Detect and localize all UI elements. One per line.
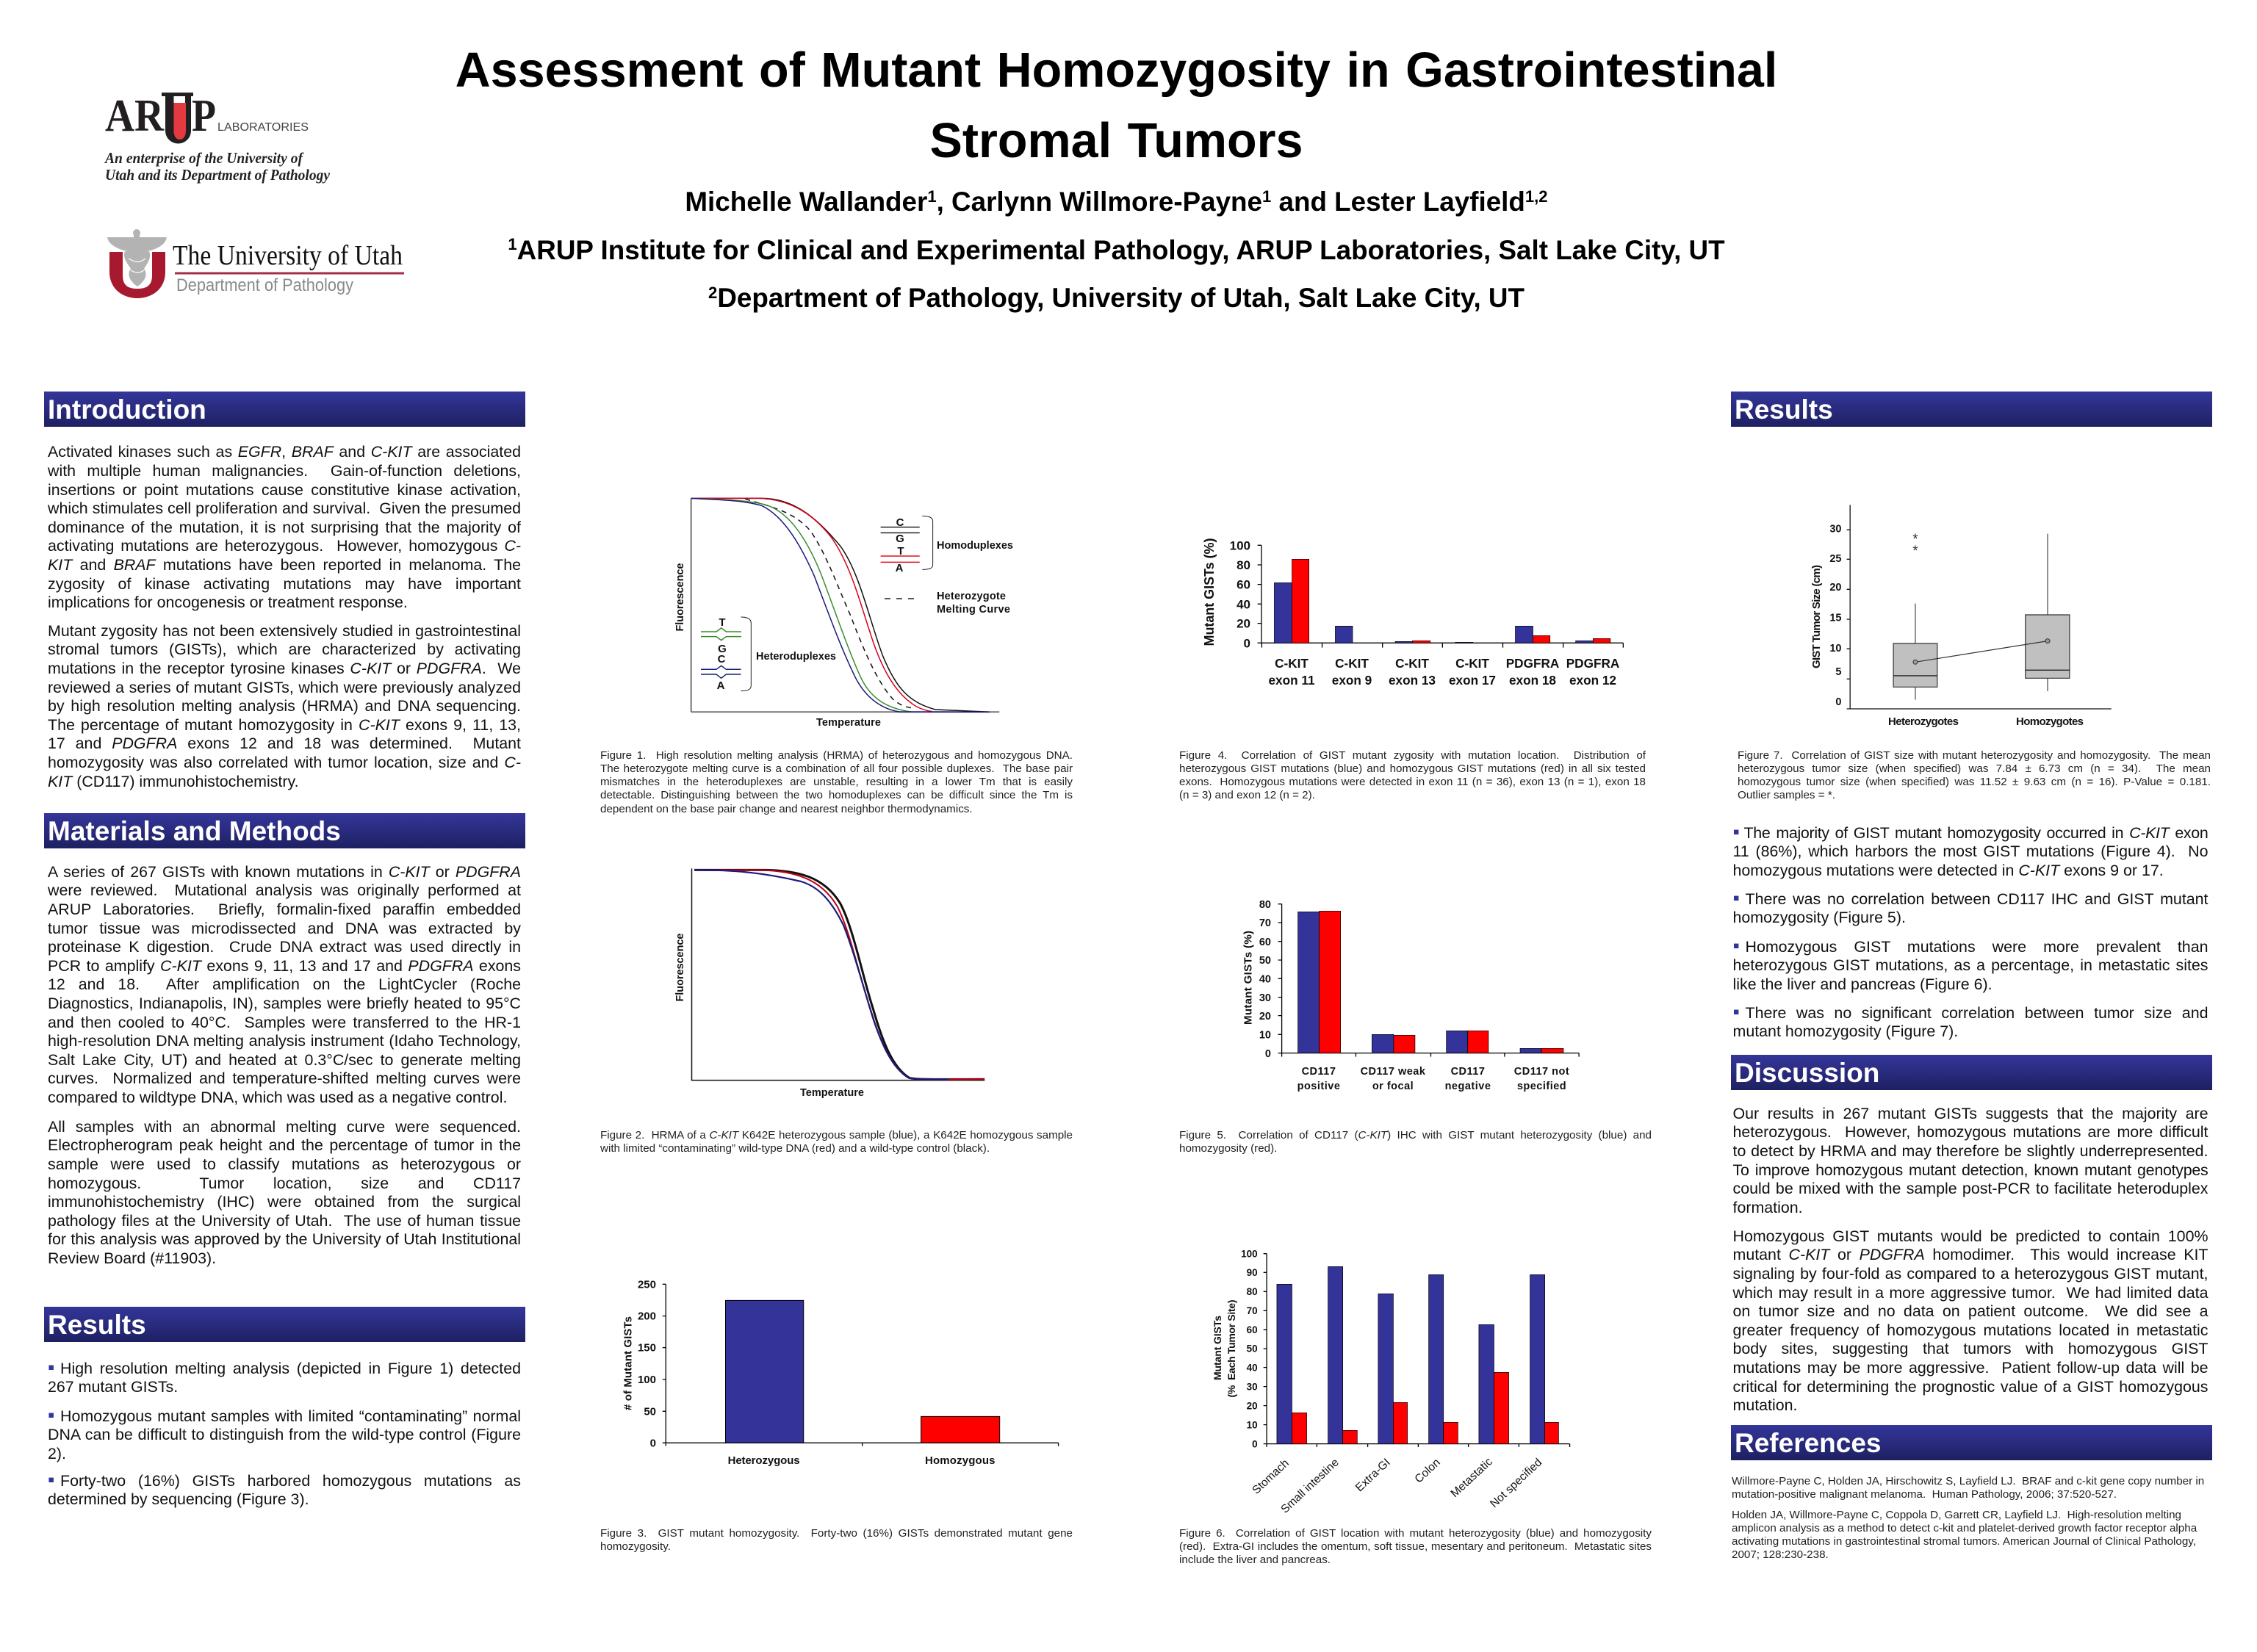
figure 5: bar chart by CD117 status: 80 bbox=[1259, 899, 1271, 911]
text: discussion paragraph 1: To improve homozygous mutant detection, known mutant genotypes bbox=[1732, 1161, 2209, 1179]
figure 4: bar chart by exon: exon 17 bbox=[1449, 673, 1496, 688]
figure 4: bar chart by exon: exon 18 bbox=[1509, 673, 1556, 688]
text: discussion paragraph 1: to detect by HRMA and may therefore be slightly underrepresented. bbox=[1732, 1142, 2209, 1160]
figure 6: bar chart by tumor location: (% Each Tumor Site) bbox=[1225, 1300, 1237, 1397]
figure 1: melting curves: T bbox=[719, 616, 726, 629]
figure 7: box plot of tumor size: 30 bbox=[1829, 523, 1841, 535]
text: methods paragraph 2: All samples with an abnormal melting curve were sequenced. bbox=[48, 1118, 521, 1136]
text: discussion paragraph 2: mutations may be more aggressive. Patient follow-up data will be bbox=[1732, 1359, 2209, 1377]
figure 6: bar chart by tumor location: 20 bbox=[1247, 1400, 1258, 1411]
bullet: metastatic sites: Homozygous GIST mutations were more prevalent than bbox=[1746, 938, 2209, 956]
bullet: forty-two GISTs bbox=[48, 1468, 521, 1508]
text: discussion paragraph 2: critical for determining the prognostic value of a GIST homozygous bbox=[1732, 1378, 2209, 1396]
authors: Michelle Wallander1, Carlynn Willmore-Payne1 and Lester Layfield1,2 bbox=[685, 187, 1548, 217]
caption: figure 4 bbox=[1179, 749, 1646, 801]
figure 5: bar chart by CD117 status: 30 bbox=[1259, 992, 1271, 1004]
text: introduction paragraph 1 bbox=[48, 443, 521, 611]
logo: ARUP Laboratories: LABORATORIES bbox=[217, 121, 309, 134]
text: methods paragraph 1: tumor tissue was microdissected and DNA was extracted by bbox=[48, 920, 521, 937]
caption: figure 1: The heterozygote melting curve is a combination of all four possible duplexes. The base pair bbox=[600, 762, 1073, 775]
figure 1: melting curves: Homoduplexes bbox=[937, 540, 1013, 552]
text: introduction paragraph 2: The percentage of mutant homozygosity in C-KIT exons 9, 11, 13, bbox=[48, 716, 521, 734]
bullet: forty-two GISTs: Forty-two (16%) GISTs harbored homozygous mutations as bbox=[60, 1472, 521, 1490]
bullet: contaminating DNA: DNA can be difficult to distinguish from the wild-type control (Figure bbox=[48, 1426, 521, 1443]
caption: figure 7: Figure 7. Correlation of GIST size with mutant heterozygosity and homozygosity. The mean bbox=[1738, 749, 2211, 762]
caption: figure 3: homozygosity. bbox=[600, 1540, 671, 1553]
text: discussion paragraph 2: mutation. bbox=[1732, 1396, 1797, 1414]
caption: figure 1: mismatches in the heteroduplexes are unstable, resulting in a lower Tm that is easily bbox=[600, 776, 1073, 788]
figure 2: HRMA curves: Fluorescence bbox=[674, 933, 686, 1002]
heading: References bbox=[1731, 1425, 2212, 1460]
caption: figure 3 bbox=[600, 1527, 1073, 1553]
text: introduction paragraph 2: by high resolution melting analysis (HRMA) and DNA sequencing. bbox=[48, 697, 521, 715]
figure 7: box plot of tumor size: GIST Tumor Size (cm) bbox=[1810, 565, 1823, 668]
figure 7: box plot of tumor size: 15 bbox=[1829, 613, 1841, 624]
text: discussion paragraph 1: formation. bbox=[1732, 1199, 1803, 1216]
text: reference 1: Willmore-Payne C, Holden JA, Hirschowitz S, Layfield LJ. BRAF and c-kit gene copy number in bbox=[1732, 1475, 2204, 1487]
logo: ARUP Laboratories: AR bbox=[105, 91, 165, 141]
figure 5: bar chart by CD117 status: 20 bbox=[1259, 1011, 1271, 1022]
text: discussion paragraph 2: Homozygous GIST mutants would be predicted to contain 100% bbox=[1732, 1227, 2209, 1245]
affiliation 2: 2Department of Pathology, University of Utah, Salt Lake City, UT bbox=[708, 283, 1525, 313]
text: methods paragraph 1: PCR to amplify C-KIT exons 9, 11, 13 and 17 and PDGFRA exons bbox=[48, 957, 521, 975]
figure 4: bar chart by exon: 100 bbox=[1230, 538, 1250, 552]
caption: figure 1: dependent on the base pair change and nearest neighbor thermodynamics. bbox=[600, 803, 973, 815]
figure 6: bar chart by tumor location: Colon bbox=[1413, 1456, 1443, 1486]
text: reference 1: mutation-positive malignant melanoma. Human Pathology, 2006; 37:520-527. bbox=[1732, 1488, 2117, 1501]
bullet: forty-two GISTs: determined by sequencing (Figure 3). bbox=[48, 1490, 309, 1508]
bullet: tumor size: There was no significant correlation between tumor size and bbox=[1746, 1004, 2209, 1022]
bullet: exon 11: The majority of GIST mutant homozygosity occurred in C-KIT exon bbox=[1744, 824, 2209, 842]
logo: The University of Utah bbox=[107, 229, 404, 298]
heading: Results (right column) bbox=[1731, 392, 2212, 427]
figure 6: bar chart by tumor location: Mutant GISTs bbox=[1212, 1316, 1223, 1380]
title: Assessment of Mutant Homozygosity in Gastrointestinal bbox=[456, 43, 1777, 98]
figure 4: bar chart by exon: 40 bbox=[1237, 597, 1250, 611]
figure 5: bar chart by CD117 status: CD117 bbox=[1302, 1066, 1336, 1078]
figure 7: box plot of tumor size: * bbox=[1912, 544, 1918, 559]
figure 4: bar chart by exon: C-KIT bbox=[1455, 656, 1489, 671]
figure 4: bar chart by exon: 20 bbox=[1237, 617, 1250, 631]
text: methods paragraph 1: Diagnostics, Indianapolis, IN), samples were briefly heated to 95°C bbox=[48, 995, 521, 1012]
figure 1: melting curves: Fluorescence bbox=[674, 563, 686, 632]
figure 4: bar chart by exon: exon 11 bbox=[1268, 673, 1315, 688]
bullet: metastatic sites: ▪ bbox=[1732, 934, 1740, 956]
text: methods paragraph 2: immunohistochemistry (IHC) were obtained from the surgical bbox=[48, 1193, 521, 1211]
affiliation 1: 1ARUP Institute for Clinical and Experimental Pathology, ARUP Laboratories, Salt Lake City, UT bbox=[508, 235, 1725, 264]
text: discussion paragraph 1: heterozygous. However, homozygous mutations are more difficult bbox=[1732, 1123, 2209, 1141]
figure 4: bar chart by exon: exon 9 bbox=[1332, 673, 1372, 688]
figure 7: box plot of tumor size: * bbox=[1912, 532, 1918, 547]
figure 5: bar chart by CD117 status bbox=[1242, 899, 1579, 1092]
figure 1: melting curves: G bbox=[718, 643, 727, 655]
figure 5: bar chart by CD117 status: CD117 weak bbox=[1361, 1066, 1426, 1078]
text: methods paragraph 2: homozygous. Tumor location, size and CD117 bbox=[48, 1175, 521, 1192]
logo: ARUP Laboratories bbox=[104, 91, 331, 184]
text: introduction paragraph 2: 17 and PDGFRA exons 12 and 18 was determined. Mutant bbox=[48, 735, 521, 752]
caption: figure 6 bbox=[1179, 1527, 1652, 1566]
figure 5: bar chart by CD117 status: Mutant GISTs (%) bbox=[1242, 931, 1255, 1025]
text: introduction paragraph 2: reviewed a series of mutant GISTs, which were previously analyzed bbox=[48, 679, 521, 696]
text: reference 2: amplicon analysis as a method to detect c-kit and platelet-derived growth factor receptor alpha bbox=[1732, 1522, 2197, 1534]
figure 7: box plot of tumor size: Homozygotes bbox=[2016, 715, 2084, 728]
figure 7: box plot of tumor size bbox=[1810, 505, 2112, 728]
text: discussion paragraph 1 bbox=[1732, 1105, 2209, 1216]
figure 5: bar chart by CD117 status: 60 bbox=[1259, 937, 1271, 948]
figure 5: bar chart by CD117 status: or focal bbox=[1372, 1081, 1414, 1092]
figure 6: bar chart by tumor location: 10 bbox=[1247, 1419, 1258, 1430]
figure 4: bar chart by exon: PDGFRA bbox=[1506, 656, 1559, 671]
caption: figure 1: Figure 1. High resolution melting analysis (HRMA) of heterozygous and homozygous DNA. bbox=[600, 749, 1073, 762]
figure 4: bar chart by exon: C-KIT bbox=[1395, 656, 1429, 671]
figure 6: bar chart by tumor location: 70 bbox=[1247, 1305, 1258, 1316]
caption: figure 7: heterozygous tumor size (when specified) was 7.84 ± 6.73 cm (n = 34). The mean bbox=[1738, 762, 2211, 775]
text: introduction paragraph 2: mutations in the receptor tyrosine kinases C-KIT or PDGFRA. We bbox=[48, 660, 521, 677]
bullet: HRMA detection: High resolution melting analysis (depicted in Figure 1) detected bbox=[60, 1360, 521, 1377]
text: methods paragraph 1: 12 and 18. After amplification on the LightCycler (Roche bbox=[48, 975, 521, 993]
figure 1: melting curves bbox=[674, 498, 1013, 729]
figure 1: melting curves: A bbox=[896, 562, 904, 574]
figure 7: box plot of tumor size: 25 bbox=[1829, 553, 1841, 565]
bullet: forty-two GISTs: ▪ bbox=[48, 1468, 54, 1490]
figure 3: bar chart of GIST homozygosity: Homozygous bbox=[925, 1454, 995, 1467]
figure 3: bar chart of GIST homozygosity: 200 bbox=[638, 1310, 656, 1323]
text: methods paragraph 1: and then cooled to 40°C. Samples were transferred to the HR-1 bbox=[48, 1014, 521, 1031]
heading: Results (left column): Results bbox=[48, 1310, 146, 1340]
figure 3: bar chart of GIST homozygosity: 250 bbox=[638, 1278, 656, 1291]
figure 1: melting curves: C bbox=[718, 653, 726, 666]
figure 3: bar chart of GIST homozygosity: 100 bbox=[638, 1374, 656, 1386]
figure 1: melting curves: Heterozygote bbox=[937, 591, 1006, 602]
figure 5: bar chart by CD117 status: 0 bbox=[1265, 1048, 1271, 1060]
figure 6: bar chart by tumor location: Metastatic bbox=[1448, 1455, 1495, 1500]
bullet: contaminating DNA: 2). bbox=[48, 1445, 66, 1462]
text: methods paragraph 1: high-resolution DNA melting analysis instrument (Idaho Technology, bbox=[48, 1032, 521, 1050]
figure 6: bar chart by tumor location: Stomach bbox=[1250, 1457, 1292, 1497]
logo: The University of Utah: Department of Pathology bbox=[176, 275, 353, 295]
figure 1: melting curves: Melting Curve bbox=[937, 604, 1010, 616]
bullet: tumor size bbox=[1732, 1000, 2209, 1040]
text: methods paragraph 1 bbox=[48, 863, 521, 1106]
bullet: HRMA detection bbox=[48, 1356, 521, 1396]
figure 4: bar chart by exon: C-KIT bbox=[1335, 656, 1369, 671]
bullet: metastatic sites: like the liver and pancreas (Figure 6). bbox=[1732, 975, 1993, 993]
figure 4: bar chart by exon: C-KIT bbox=[1275, 656, 1309, 671]
figure 6: bar chart by tumor location: Extra-GI bbox=[1353, 1456, 1393, 1494]
figure 1: melting curves: C bbox=[896, 516, 904, 529]
heading: Discussion bbox=[1731, 1055, 2212, 1090]
figure 1: melting curves: A bbox=[717, 679, 725, 692]
figure 5: bar chart by CD117 status: 50 bbox=[1259, 955, 1271, 967]
caption: figure 3: Figure 3. GIST mutant homozygosity. Forty-two (16%) GISTs demonstrated mutant gene bbox=[600, 1527, 1073, 1540]
figure 6: bar chart by tumor location: 80 bbox=[1247, 1286, 1258, 1297]
figure 1: melting curves: G bbox=[896, 533, 904, 545]
figure 5: bar chart by CD117 status: specified bbox=[1517, 1081, 1566, 1092]
bullet: exon 11: ▪ bbox=[1732, 820, 1739, 843]
caption: figure 2: Figure 2. HRMA of a C-KIT K642E heterozygous sample (blue), a K642E homozygous sample bbox=[600, 1129, 1073, 1141]
text: reference 2: Holden JA, Willmore-Payne C, Coppola D, Garrett CR, Layfield LJ. High-resolution melting bbox=[1732, 1509, 2181, 1521]
heading: Results (left column) bbox=[44, 1307, 525, 1342]
text: introduction paragraph 1: Activated kinases such as EGFR, BRAF and C-KIT are associated bbox=[48, 443, 521, 461]
text: discussion paragraph 2: signaling by four-fold as compared to a heterozygous GIST mutant, bbox=[1732, 1265, 2209, 1283]
heading: Discussion: Discussion bbox=[1735, 1058, 1879, 1088]
bullet: exon 11 bbox=[1732, 820, 2209, 879]
figure 4: bar chart by exon: 80 bbox=[1237, 558, 1250, 572]
text: methods paragraph 2: for this analysis was approved by the University of Utah Institutional bbox=[48, 1230, 521, 1248]
logo: ARUP Laboratories: P bbox=[192, 91, 216, 141]
text: methods paragraph 1: Salt Lake City, UT) and heated at 0.3°C/sec to generate melting bbox=[48, 1051, 521, 1069]
caption: figure 7: Outlier samples = *. bbox=[1738, 789, 1835, 801]
figure 4: bar chart by exon: 60 bbox=[1237, 578, 1250, 592]
logo: ARUP Laboratories: Utah and its Department of Pathology bbox=[105, 166, 331, 184]
text: methods paragraph 2: sample were used to classify mutations as heterozygous or bbox=[48, 1155, 521, 1173]
bullet: HRMA detection: ▪ bbox=[48, 1356, 54, 1378]
figure 5: bar chart by CD117 status: negative bbox=[1445, 1081, 1491, 1092]
text: introduction paragraph 1: insertions or point mutations cause constitutive kinase activation, bbox=[48, 481, 521, 499]
figure 6: bar chart by tumor location: 0 bbox=[1252, 1438, 1258, 1449]
text: discussion paragraph 2: body sites, suggesting that tumors with homozygous GIST bbox=[1732, 1340, 2209, 1357]
figure 3: bar chart of GIST homozygosity: 50 bbox=[644, 1406, 656, 1418]
figure 6: bar chart by tumor location: 90 bbox=[1247, 1267, 1258, 1278]
heading: Materials and Methods bbox=[44, 813, 525, 848]
figure 3: bar chart of GIST homozygosity: # of Mutant GISTs bbox=[622, 1316, 635, 1410]
figure 5: bar chart by CD117 status: CD117 not bbox=[1514, 1066, 1569, 1078]
text: methods paragraph 1: ARUP Laboratories. Briefly, formalin-fixed paraffin embedded bbox=[48, 901, 521, 918]
figure 3: bar chart of GIST homozygosity: Heterozygous bbox=[728, 1454, 800, 1467]
bullet: CD117 bbox=[1732, 887, 2209, 926]
text: introduction paragraph 2 bbox=[48, 622, 521, 790]
figure 7: box plot of tumor size: 5 bbox=[1835, 666, 1841, 678]
text: reference 1 bbox=[1732, 1475, 2204, 1501]
title: Stromal Tumors bbox=[930, 114, 1303, 168]
caption: figure 5: homozygosity (red). bbox=[1179, 1142, 1277, 1155]
text: methods paragraph 1: proteinase K digestion. Crude DNA extract was used directly in bbox=[48, 938, 521, 956]
caption: figure 5 bbox=[1179, 1129, 1652, 1155]
heading: Introduction bbox=[44, 392, 525, 427]
figure 7: box plot of tumor size: Heterozygotes bbox=[1888, 715, 1959, 728]
bullet: metastatic sites bbox=[1732, 934, 2209, 993]
figure 7: box plot of tumor size: 10 bbox=[1829, 643, 1841, 654]
heading: References: References bbox=[1735, 1428, 1882, 1458]
figure 6: bar chart by tumor location: 30 bbox=[1247, 1381, 1258, 1392]
bullet: exon 11: homozygous mutations were detected in C-KIT exons 9 or 17. bbox=[1732, 862, 2164, 879]
figure 1: melting curves: Heteroduplexes bbox=[756, 651, 836, 663]
text: introduction paragraph 1: activating mutations are heterozygous. However, homozygous C- bbox=[48, 537, 521, 555]
caption: figure 4: (n = 3) and exon 12 (n = 2). bbox=[1179, 789, 1315, 801]
text: introduction paragraph 1: zygosity of kinase activating mutations may have important bbox=[48, 575, 521, 593]
figure 2: HRMA curves bbox=[674, 868, 984, 1099]
bullet: CD117: homozygosity (Figure 5). bbox=[1732, 909, 1906, 926]
logo: The University of Utah: The University of Utah bbox=[173, 240, 403, 271]
bullet: tumor size: mutant homozygosity (Figure 7). bbox=[1732, 1022, 1958, 1040]
text: reference 2: 2007; 128:230-238. bbox=[1732, 1548, 1829, 1561]
figure 6: bar chart by tumor location: Not specified bbox=[1488, 1456, 1544, 1510]
text: introduction paragraph 1: KIT and BRAF mutations have been reported in melanoma. The bbox=[48, 556, 521, 574]
figure 4: bar chart by exon: 0 bbox=[1244, 636, 1250, 650]
caption: figure 6: (red). Extra-GI includes the omentum, soft tissue, mesentary and peritoneum. Metastatic sites bbox=[1179, 1540, 1652, 1553]
text: introduction paragraph 1: with multiple human malignancies. Gain-of-function deletions, bbox=[48, 462, 521, 480]
caption: figure 4: exons. Homozygous mutations were detected in exon 11 (n = 36), exon 13 (n = 1), exon 18 bbox=[1179, 776, 1646, 788]
bullet: CD117: There was no correlation between CD117 IHC and GIST mutant bbox=[1746, 890, 2209, 908]
figure 3: bar chart of GIST homozygosity bbox=[622, 1278, 1059, 1467]
figure 4: bar chart by exon bbox=[1202, 538, 1623, 688]
title bbox=[456, 43, 1777, 168]
text: discussion paragraph 2: greater frequency of homozygous mutations located in metastatic bbox=[1732, 1321, 2209, 1339]
caption: figure 7: homozygous tumor size (when specified) was 11.52 ± 9.63 cm (n = 16). P-Value = 0.181. bbox=[1738, 776, 2211, 788]
bullet: HRMA detection: 267 mutant GISTs. bbox=[48, 1378, 178, 1396]
figure 7: box plot of tumor size: 20 bbox=[1829, 582, 1841, 594]
figure 6: bar chart by tumor location: 40 bbox=[1247, 1362, 1258, 1373]
figure 6: bar chart by tumor location bbox=[1212, 1248, 1570, 1516]
text: introduction paragraph 1: implications for oncogenesis or treatment response. bbox=[48, 594, 408, 611]
figure 6: bar chart by tumor location: Small intestine bbox=[1278, 1456, 1342, 1516]
text: discussion paragraph 2: mutant C-KIT or PDGFRA homodimer. This would increase KIT bbox=[1732, 1246, 2209, 1263]
figure 6: bar chart by tumor location: 60 bbox=[1247, 1324, 1258, 1335]
caption: figure 2: with limited “contaminating” wild-type DNA (red) and a wild-type control (black). bbox=[600, 1142, 990, 1155]
text: methods paragraph 1: were reviewed. Mutational analysis was originally performed at bbox=[48, 881, 521, 899]
text: methods paragraph 2 bbox=[48, 1118, 521, 1267]
figure 5: bar chart by CD117 status: 10 bbox=[1259, 1030, 1271, 1042]
text: introduction paragraph 2: Mutant zygosity has not been extensively studied in gastrointestinal bbox=[48, 622, 521, 640]
figure 4: bar chart by exon: PDGFRA bbox=[1566, 656, 1619, 671]
bullet: contaminating DNA bbox=[48, 1404, 521, 1462]
text: discussion paragraph 2: on tumor size and no data on patient outcome. We did see a bbox=[1732, 1302, 2209, 1320]
figure 6: bar chart by tumor location: 100 bbox=[1241, 1248, 1258, 1259]
text: reference 2: activating mutations in gastrointestinal stromal tumors. American Journal of Clinical Pathology, bbox=[1732, 1535, 2196, 1548]
text: introduction paragraph 2: homozygosity was also correlated with tumor location, size and C- bbox=[48, 754, 521, 771]
text: methods paragraph 2: Electropherogram peak height and the percentage of tumor in the bbox=[48, 1136, 521, 1154]
text: introduction paragraph 1: dominance of the mutation, it is not surprising that the majority of bbox=[48, 519, 521, 536]
figure 4: bar chart by exon: exon 13 bbox=[1389, 673, 1436, 688]
heading: Materials and Methods: Materials and Methods bbox=[48, 816, 341, 846]
bullet: CD117: ▪ bbox=[1732, 887, 1740, 909]
caption: figure 2 bbox=[600, 1129, 1073, 1155]
figure 7: box plot of tumor size: 0 bbox=[1835, 696, 1841, 708]
figure 4: bar chart by exon: exon 12 bbox=[1569, 673, 1616, 688]
text: discussion paragraph 1: could be mixed with the sample post-PCR to facilitate heteroduplex bbox=[1732, 1180, 2209, 1197]
text: methods paragraph 1: A series of 267 GISTs with known mutations in C-KIT or PDGFRA bbox=[48, 863, 521, 881]
text: discussion paragraph 1: Our results in 267 mutant GISTs suggests that the majority are bbox=[1732, 1105, 2209, 1122]
caption: figure 1: detectable. Distinguishing between the two homoduplexes can be difficult since the Tm is bbox=[600, 789, 1073, 801]
text: methods paragraph 2: Review Board (#11903). bbox=[48, 1249, 216, 1267]
figure 1: melting curves: Temperature bbox=[816, 717, 881, 729]
bullet: metastatic sites: heterozygous GIST mutations, as a percentage, in metastatic sites bbox=[1732, 956, 2209, 974]
figure 5: bar chart by CD117 status: positive bbox=[1297, 1081, 1340, 1092]
figure 5: bar chart by CD117 status: CD117 bbox=[1451, 1066, 1485, 1078]
text: introduction paragraph 1: which stimulates cell proliferation and survival. Given the presumed bbox=[48, 499, 521, 517]
figure 3: bar chart of GIST homozygosity: 150 bbox=[638, 1342, 656, 1355]
figure 2: HRMA curves: Temperature bbox=[800, 1087, 864, 1099]
figure 6: bar chart by tumor location: 50 bbox=[1247, 1343, 1258, 1355]
text: introduction paragraph 2: KIT (CD117) immunohistochemistry. bbox=[48, 773, 299, 790]
text: methods paragraph 1: compared to wildtype DNA, which was used as a negative control. bbox=[48, 1089, 507, 1106]
text: methods paragraph 1: curves. Normalized and temperature-shifted melting curves were bbox=[48, 1070, 521, 1087]
figure 5: bar chart by CD117 status: 70 bbox=[1259, 917, 1271, 929]
figure 3: bar chart of GIST homozygosity: 0 bbox=[650, 1437, 656, 1450]
caption: figure 1 bbox=[600, 749, 1073, 815]
caption: figure 4: heterozygous GIST mutations (blue) and homozygous GIST mutations (red) in all six tested bbox=[1179, 762, 1646, 775]
bullet: tumor size: ▪ bbox=[1732, 1000, 1740, 1022]
figure 1: melting curves: T bbox=[897, 545, 904, 558]
figure 4: bar chart by exon: Mutant GISTs (%) bbox=[1202, 538, 1217, 646]
bullet: contaminating DNA: ▪ bbox=[48, 1404, 54, 1426]
heading: Introduction: Introduction bbox=[48, 394, 206, 425]
text: discussion paragraph 2: which may result in a more aggressive tumor. We had limited data bbox=[1732, 1284, 2209, 1302]
heading: Results (right column): Results bbox=[1735, 394, 1833, 425]
text: introduction paragraph 2: stromal tumors (GISTs), which are characterized by activating bbox=[48, 641, 521, 658]
text: discussion paragraph 2 bbox=[1732, 1227, 2209, 1414]
caption: figure 5: Figure 5. Correlation of CD117 (C-KIT) IHC with GIST mutant heterozygosity (blue) and bbox=[1179, 1129, 1652, 1141]
caption: figure 6: include the liver and pancreas. bbox=[1179, 1554, 1331, 1566]
caption: figure 6: Figure 6. Correlation of GIST location with mutant heterozygosity (blue) and homozygosity bbox=[1179, 1527, 1652, 1540]
caption: figure 7 bbox=[1738, 749, 2211, 801]
text: methods paragraph 2: pathology files at the University of Utah. The use of human tissue bbox=[48, 1212, 521, 1230]
logo: ARUP Laboratories: An enterprise of the University of bbox=[104, 149, 304, 167]
caption: figure 4: Figure 4. Correlation of GIST mutant zygosity with mutation location. Distribution of bbox=[1179, 749, 1646, 762]
bullet: exon 11: 11 (86%), which harbors the most GIST mutations (Figure 4). No bbox=[1732, 843, 2209, 860]
figure 5: bar chart by CD117 status: 40 bbox=[1259, 974, 1271, 986]
bullet: contaminating DNA: Homozygous mutant samples with limited “contaminating” normal bbox=[60, 1407, 521, 1425]
text: reference 2 bbox=[1732, 1509, 2197, 1561]
